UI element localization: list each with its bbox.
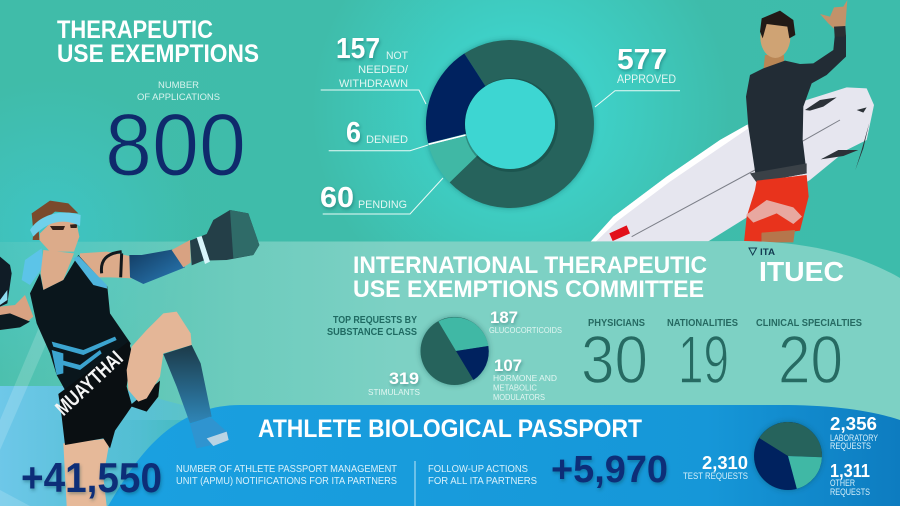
stat: nationalities: 19 xyxy=(678,322,729,398)
illustration: kickboxer: MUAYTHAI xyxy=(51,347,128,420)
label: 107 hormone and metabolic modulators: 107 xyxy=(494,356,522,375)
stat: follow-up actions: +5,970 xyxy=(551,449,668,491)
label: 157 not needed / withdrawn: NEEDED/ xyxy=(358,64,409,76)
pie caption: top requests by substance class: SUBSTANCE CLASS xyxy=(327,327,417,338)
label: 107 hormone and metabolic modulators: MODULATORS xyxy=(493,392,545,402)
donut chart: applications outcome xyxy=(426,40,594,208)
label: 157 not needed / withdrawn: NOT xyxy=(386,50,408,62)
label: 60 pending: PENDING xyxy=(358,199,407,211)
label: 187 glucocorticoids: GLUCOCORTICOIDS xyxy=(489,325,562,335)
heading: international therapeutic use exemptions committee: USE EXEMPTIONS COMMITTEE xyxy=(353,276,704,303)
label: 2,310 test requests: 2,310 xyxy=(702,453,748,473)
band: light blue lower left xyxy=(0,386,240,506)
stat: nationalities xyxy=(667,317,738,398)
number of applications caption: NUMBER xyxy=(158,80,199,91)
label: 187 glucocorticoids: 187 xyxy=(490,308,518,327)
label: 157 not needed / withdrawn: 157 xyxy=(336,33,380,65)
label: 107 hormone and metabolic modulators: METABOLIC xyxy=(493,382,537,392)
title: therapeutic use exemptions: THERAPEUTIC xyxy=(57,16,213,44)
label: 577 approved: 577 xyxy=(617,44,667,76)
label: 6 denied xyxy=(329,117,428,151)
title: therapeutic use exemptions xyxy=(57,16,259,68)
label: 2,310 test requests: TEST REQUESTS xyxy=(683,471,748,481)
label: 1,311 other requests xyxy=(830,461,870,497)
decorative light streak and corner tint xyxy=(0,325,50,506)
pie caption: top requests by substance class: TOP REQUESTS BY xyxy=(333,315,417,326)
stat: follow-up actions xyxy=(428,449,668,491)
label: 319 stimulants: 319 xyxy=(389,369,419,388)
label: 157 not needed / withdrawn: WITHDRAWN xyxy=(339,78,408,90)
logo: ITA ITUEC: ITUEC xyxy=(759,256,844,287)
logo: ITA ITUEC: ITA xyxy=(760,247,776,257)
pie caption: top requests by substance class xyxy=(327,315,417,338)
stat: APMU notifications: +41,550 xyxy=(21,454,162,501)
number of applications caption: OF APPLICATIONS xyxy=(137,92,220,103)
label: 6 denied: DENIED xyxy=(366,134,408,146)
label: 2,356 laboratory requests xyxy=(830,414,878,451)
stat: nationalities: NATIONALITIES xyxy=(667,317,738,329)
label: 2,356 laboratory requests: REQUESTS xyxy=(830,441,871,451)
label: 107 hormone and metabolic modulators xyxy=(493,356,557,402)
label: 2,356 laboratory requests: LABORATORY xyxy=(830,433,878,443)
label: 2,356 laboratory requests: 2,356 xyxy=(830,414,877,434)
heading: athlete biological passport: ATHLETE BIOLOGICAL PASSPORT xyxy=(258,415,642,443)
pie chart: ABP requests xyxy=(754,422,822,490)
stat: APMU notifications: NUMBER OF ATHLETE PASSPORT MANAGEMENT xyxy=(176,463,398,475)
stat: APMU notifications xyxy=(21,454,398,501)
stat: physicians: PHYSICIANS xyxy=(588,317,645,329)
stat: clinical specialties: CLINICAL SPECIALTIES xyxy=(756,317,862,329)
label: 319 stimulants: STIMULANTS xyxy=(368,387,420,397)
stat: clinical specialties: 20 xyxy=(778,322,843,398)
stat: physicians: 30 xyxy=(581,322,648,398)
label: 187 glucocorticoids xyxy=(489,308,562,335)
heading: international therapeutic use exemptions committee xyxy=(353,252,707,303)
divider xyxy=(414,461,416,506)
label: 1,311 other requests: REQUESTS xyxy=(830,487,870,497)
stat: follow-up actions: FOR ALL ITA PARTNERS xyxy=(428,475,537,487)
label: 577 approved xyxy=(595,44,680,107)
logo: ITA ITUEC xyxy=(749,247,844,287)
big number 800: 800 xyxy=(105,95,246,194)
label: 319 stimulants xyxy=(368,369,420,397)
label: 107 hormone and metabolic modulators: HORMONE AND xyxy=(493,373,557,383)
label: 577 approved: APPROVED xyxy=(617,74,676,86)
number of applications caption xyxy=(137,80,220,103)
stat: follow-up actions: FOLLOW-UP ACTIONS xyxy=(428,463,528,475)
stat: APMU notifications: UNIT (APMU) NOTIFICATIONS FOR ITA PARTNERS xyxy=(176,475,397,487)
band: athlete biological passport background xyxy=(108,405,900,506)
illustration: kickboxer xyxy=(0,201,259,506)
stat: clinical specialties xyxy=(756,317,862,398)
title: therapeutic use exemptions: USE EXEMPTIONS xyxy=(57,40,259,68)
label: 1,311 other requests: OTHER xyxy=(830,478,855,488)
label: 2,310 test requests xyxy=(683,453,748,481)
illustration: surfer with board xyxy=(590,0,874,242)
pie chart: substance class xyxy=(420,317,489,385)
band: ITUEC panel background xyxy=(0,241,900,420)
label: 157 not needed / withdrawn xyxy=(321,33,426,104)
label: 60 pending: 60 xyxy=(320,182,354,214)
heading: international therapeutic use exemptions committee: INTERNATIONAL THERAPEUTIC xyxy=(353,252,707,279)
label: 6 denied: 6 xyxy=(346,117,361,149)
label: 60 pending xyxy=(320,178,443,214)
label: 1,311 other requests: 1,311 xyxy=(830,461,870,481)
